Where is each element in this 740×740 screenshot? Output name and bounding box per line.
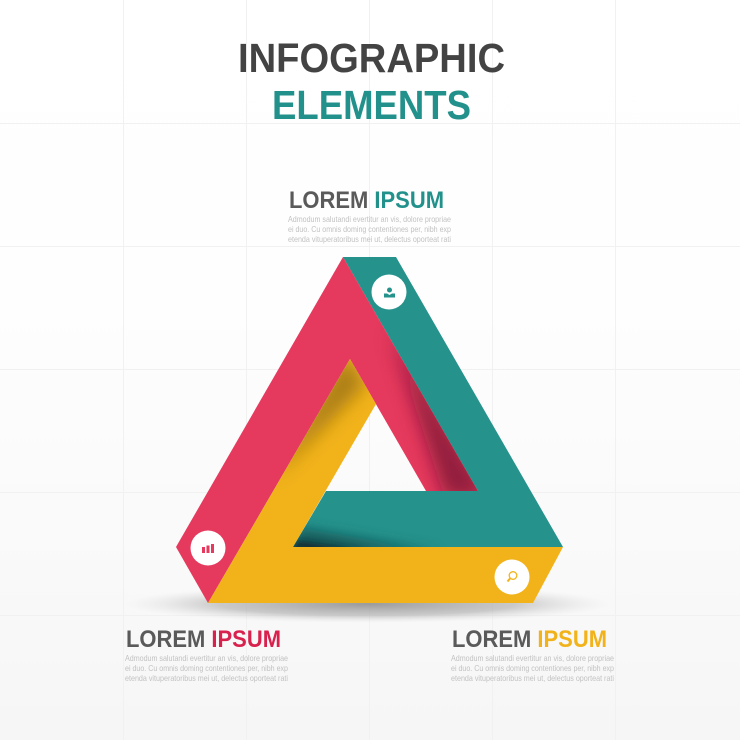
body: bottom left: Admodum salutandi evertitur an vis, dolore propriae — [125, 653, 288, 663]
body: top: ei duo. Cu omnis doming contentiones per, nibh exp — [288, 224, 451, 234]
impossible triangle — [176, 257, 563, 603]
body: bottom right: etenda vituperatoribus mei ut, delectus oporteat rati — [451, 673, 614, 683]
title: ELEMENTS — [272, 82, 471, 128]
icon: magnifier — [494, 560, 530, 594]
icon: bar chart — [190, 530, 226, 566]
teal segment — [285, 257, 563, 552]
body: top: Admodum salutandi evertitur an vis, dolore propriae — [288, 214, 451, 224]
text block: bottom left — [125, 626, 288, 683]
title: INFOGRAPHIC — [238, 35, 505, 81]
body: top: etenda vituperatoribus mei ut, delectus oporteat rati — [288, 234, 451, 244]
text block: bottom right — [451, 626, 614, 683]
title — [238, 35, 505, 128]
body: bottom right: Admodum salutandi evertitur an vis, dolore propriae — [451, 653, 614, 663]
text block: top — [288, 187, 451, 244]
body: bottom right — [451, 653, 614, 683]
body: bottom right: ei duo. Cu omnis doming contentiones per, nibh exp — [451, 663, 614, 673]
heading: top: LOREM IPSUM — [289, 187, 444, 214]
heading: bottom left: LOREM IPSUM — [126, 626, 281, 653]
red segment — [176, 257, 490, 603]
icon: user — [372, 274, 406, 310]
yellow segment — [208, 352, 563, 603]
body: bottom left: etenda vituperatoribus mei ut, delectus oporteat rati — [125, 673, 288, 683]
body: bottom left: ei duo. Cu omnis doming contentiones per, nibh exp — [125, 663, 288, 673]
heading: bottom right: LOREM IPSUM — [452, 626, 607, 653]
body: bottom left — [125, 653, 288, 683]
body: top — [288, 214, 451, 244]
ground shadow — [120, 585, 614, 623]
